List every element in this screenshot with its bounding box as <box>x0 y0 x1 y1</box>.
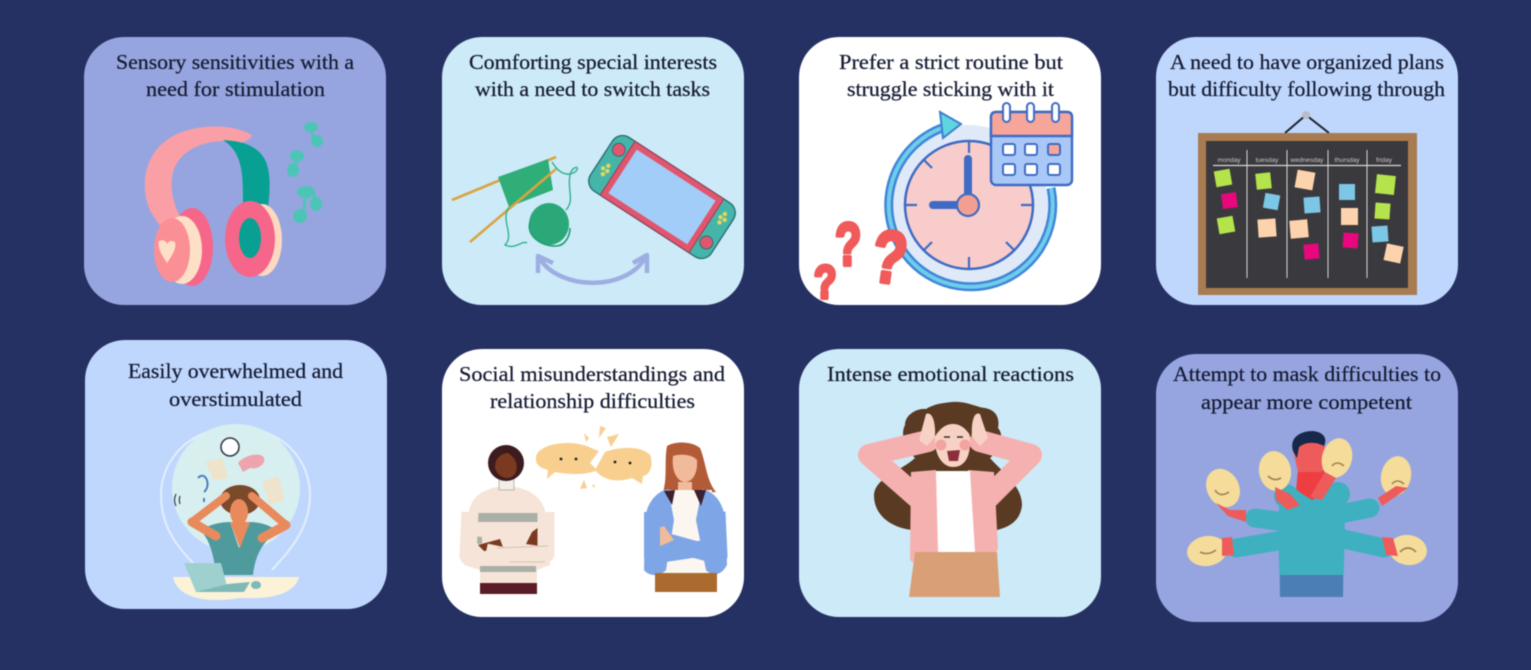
panel: social misunderstandings <box>442 349 744 617</box>
icon: question marks: ? <box>814 256 836 308</box>
heading: strict routine <box>839 50 1063 101</box>
icon: music notes <box>287 122 323 223</box>
heading: special interests <box>469 50 717 101</box>
heading: overwhelmed <box>128 359 343 411</box>
illustration: broken speech bubbles <box>536 426 652 489</box>
heading: masking difficulties <box>1173 362 1441 414</box>
sticky notes <box>1214 169 1404 263</box>
heading: sensory sensitivities: Sensory sensitivities with a <box>116 50 354 74</box>
panel: emotional reactions <box>799 349 1101 617</box>
panel: sensory sensitivities <box>84 37 386 305</box>
illustration: overstimulated woman at laptop <box>161 424 310 600</box>
heading: social misunderstandings: Social misunderstandings and <box>459 362 725 386</box>
panel: special interests <box>442 37 744 305</box>
icon: clock with circular arrow <box>888 112 1053 287</box>
planner weekday labels: tuesday <box>1256 157 1279 164</box>
panel: organized plans <box>1156 37 1458 305</box>
icon: question marks: ? <box>835 212 861 279</box>
illustration: woman in blue jacket <box>644 442 727 592</box>
heading: strict routine: Prefer a strict routine but <box>839 50 1063 74</box>
icon: hanging planner board <box>1198 111 1417 295</box>
planner weekday labels <box>1217 157 1393 164</box>
masks <box>1185 435 1429 569</box>
heading: masking difficulties: appear more competent <box>1201 390 1412 414</box>
panel: masking difficulties <box>1156 354 1458 622</box>
planner weekday labels: wednesday <box>1290 157 1324 164</box>
heading: special interests: with a need to switch tasks <box>475 77 710 101</box>
heading: strict routine: struggle sticking with it <box>847 77 1054 101</box>
heading: social misunderstandings: relationship difficulties <box>490 389 695 413</box>
heading: special interests: Comforting special interests <box>469 50 717 74</box>
panel: overwhelmed <box>85 340 387 609</box>
icon: calendar <box>991 103 1072 185</box>
icon: headphones <box>145 126 282 286</box>
woman <box>192 485 286 575</box>
heading: emotional reactions: Intense emotional reactions <box>827 362 1074 386</box>
hands <box>1216 472 1408 556</box>
heading: social misunderstandings <box>459 362 725 413</box>
icon: handheld game console <box>584 131 740 263</box>
illustration: person holding masks <box>1185 431 1429 597</box>
illustration: person in striped sweater <box>463 445 550 594</box>
planner weekday labels: monday <box>1217 157 1241 164</box>
icon: knitting and yarn <box>452 157 577 246</box>
heading: overwhelmed: overstimulated <box>169 387 302 411</box>
heading: sensory sensitivities: need for stimulation <box>146 77 325 101</box>
icon: question marks: ? <box>867 214 912 300</box>
heading: overwhelmed: Easily overwhelmed and <box>128 359 343 383</box>
panel: strict routine <box>799 37 1101 308</box>
planner weekday labels: friday <box>1376 157 1393 164</box>
arrow: two-way switching <box>538 255 647 283</box>
heading: masking difficulties: Attempt to mask difficulties to <box>1173 362 1441 386</box>
desk and laptop <box>173 563 299 600</box>
planner weekday labels: thursday <box>1335 157 1360 164</box>
icon: question marks <box>814 212 912 308</box>
heading: organized plans: but difficulty following through <box>1168 77 1445 101</box>
heading: organized plans: A need to have organized plans <box>1170 50 1444 74</box>
heading: sensory sensitivities <box>116 50 354 101</box>
heading: organized plans <box>1168 50 1445 101</box>
illustration: distressed woman with hands on head <box>869 402 1031 597</box>
